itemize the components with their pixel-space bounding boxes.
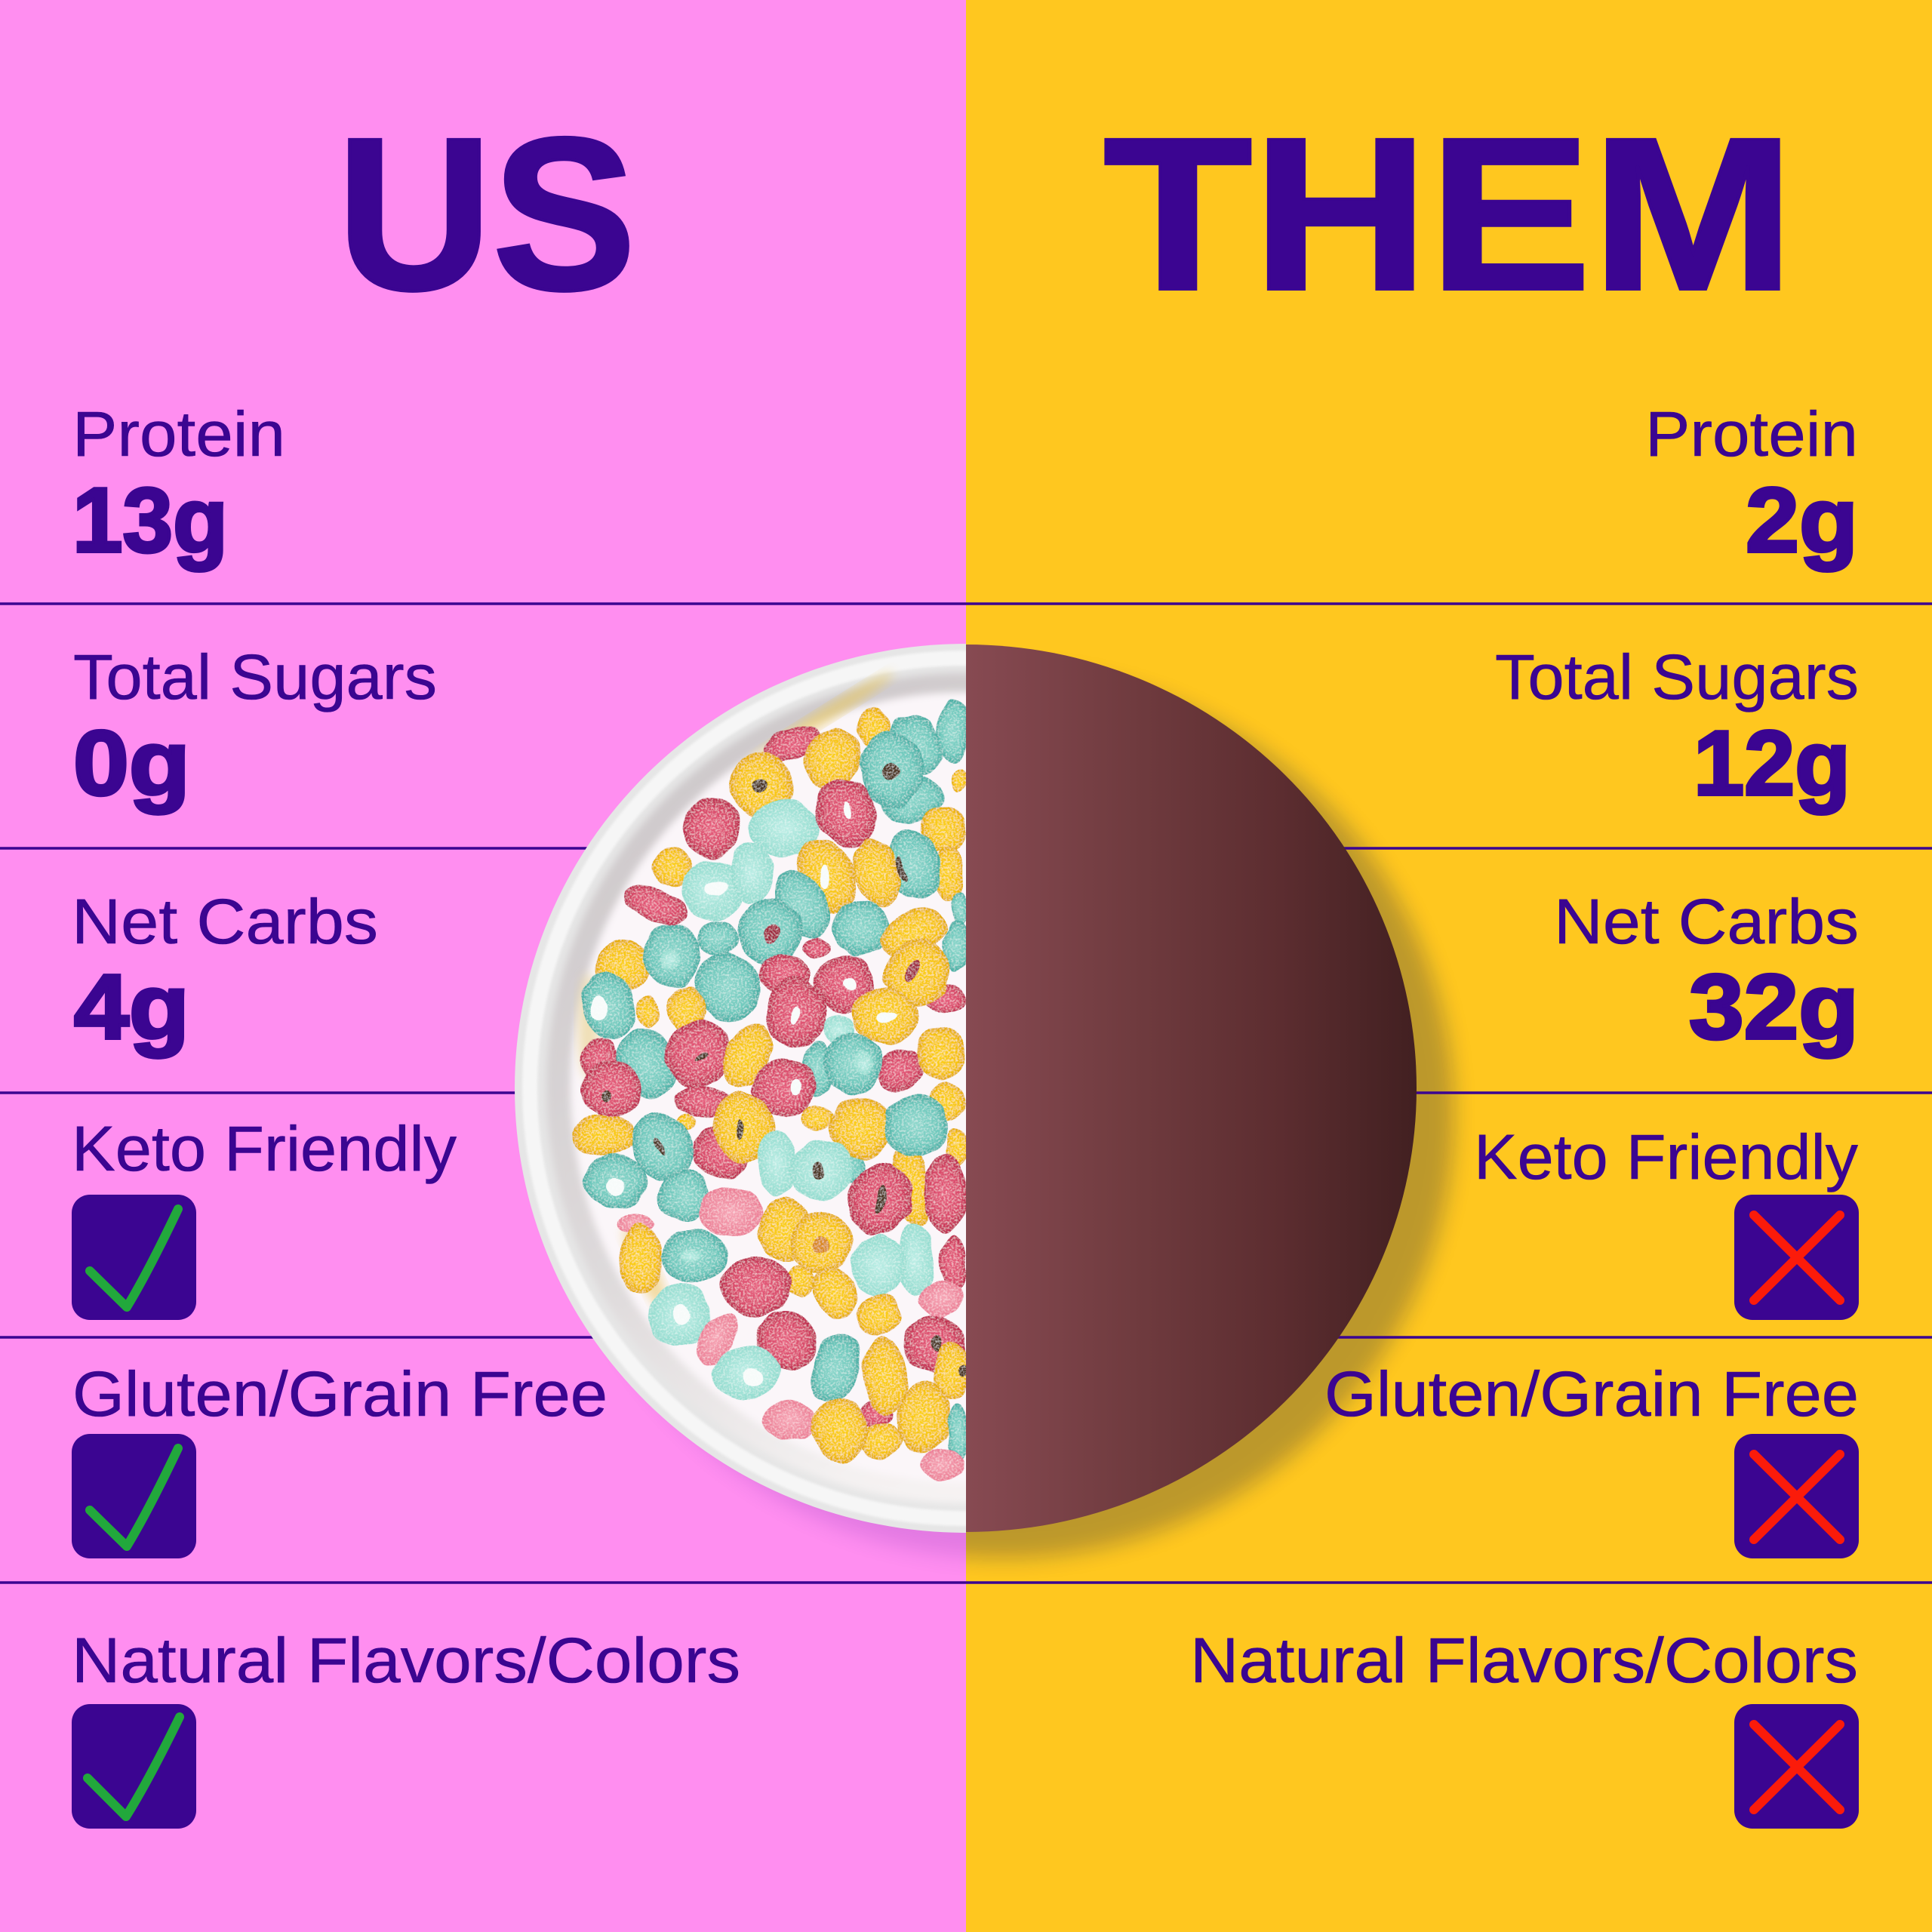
row: natural flavors colors us: [72, 1625, 740, 1829]
row: keto friendly them: [1474, 1121, 1859, 1320]
cereal: lower half pieces: [571, 1060, 969, 1481]
row: total sugars them: Total Sugars: [1495, 641, 1859, 712]
icon: cross mark: [1734, 1195, 1859, 1320]
shadow: bowl shadow on pink: [690, 1440, 966, 1562]
row: keto friendly them: Keto Friendly: [1474, 1121, 1858, 1192]
row: total sugars them: [1495, 641, 1859, 814]
panel: us column rows: [72, 398, 740, 1829]
illustration: cereal bowl left half: [515, 644, 966, 1533]
row: total sugars them: 12g: [1694, 712, 1850, 814]
icon: check mark: [72, 1195, 196, 1320]
cereal: upper half pieces: [574, 700, 969, 1106]
row: protein them: Protein: [1645, 398, 1858, 469]
row: gluten grain free them: [1324, 1358, 1859, 1558]
row: gluten grain free us: [72, 1358, 608, 1558]
illustration: brown half circle: [966, 645, 1417, 1532]
row: net carbs us: 4g: [74, 955, 189, 1058]
row: natural flavors colors them: Natural Flavors/Colors: [1190, 1625, 1858, 1696]
row: keto friendly us: Keto Friendly: [72, 1113, 457, 1184]
shadow: bowl shadow on yellow: [966, 676, 1466, 1570]
icon: check mark: [72, 1434, 196, 1558]
heading: THEM: THEM: [1103, 93, 1795, 336]
row: protein us: 13g: [72, 469, 228, 571]
row: keto friendly us: [72, 1113, 457, 1320]
row: total sugars us: 0g: [73, 712, 190, 814]
row: gluten grain free us: Gluten/Grain Free: [72, 1358, 608, 1429]
icon: cross mark: [1734, 1434, 1859, 1558]
row: natural flavors colors them: [1190, 1625, 1859, 1829]
row: net carbs us: [72, 886, 378, 1058]
row: protein them: [1645, 398, 1858, 571]
row: net carbs them: Net Carbs: [1554, 886, 1859, 957]
row: natural flavors colors us: Natural Flavors/Colors: [72, 1625, 740, 1696]
panel: them background: [966, 0, 1932, 1932]
row: net carbs them: 32g: [1689, 955, 1859, 1058]
row: total sugars us: Total Sugars: [73, 641, 437, 712]
row: net carbs us: Net Carbs: [72, 886, 378, 957]
panel: us background: [0, 0, 966, 1932]
row: protein them: 2g: [1746, 469, 1858, 571]
row: protein us: Protein: [72, 398, 285, 469]
icon: cross mark: [1734, 1704, 1859, 1829]
icon: check mark: [72, 1704, 196, 1829]
row: protein us: [72, 398, 285, 571]
row: total sugars us: [73, 641, 437, 814]
heading: US: US: [337, 93, 636, 336]
panel: them column rows: [1190, 398, 1859, 1829]
row: net carbs them: [1554, 886, 1859, 1058]
row: gluten grain free them: Gluten/Grain Free: [1324, 1358, 1859, 1429]
